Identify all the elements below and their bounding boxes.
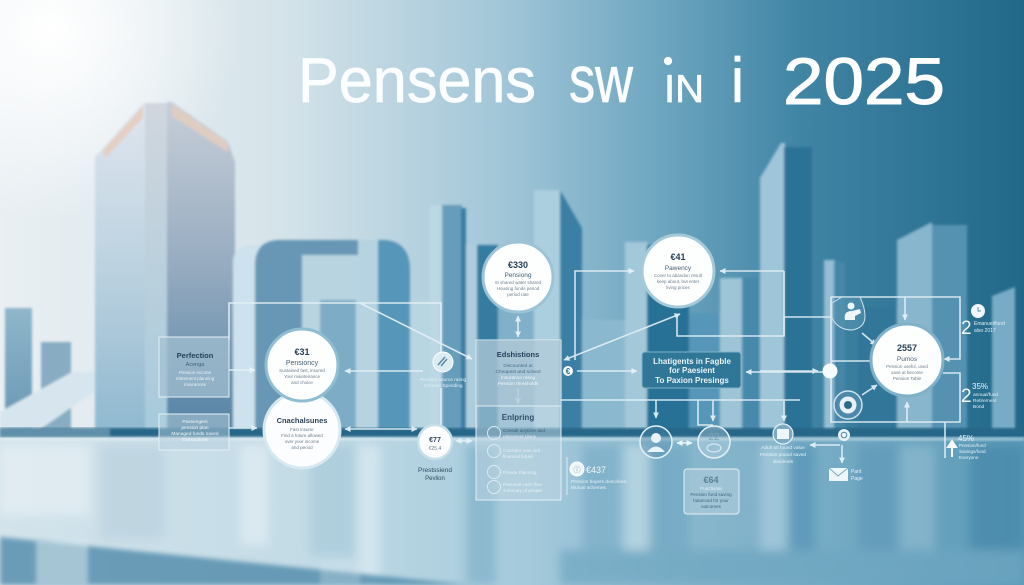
panel: challenges callout: for Paesient — [669, 366, 715, 375]
title: Pensens — [298, 46, 536, 116]
panel: editions and enterprising column: Insurance rating — [501, 375, 536, 381]
label: document caption: Pension pound saved — [760, 452, 806, 458]
stat: 45 percent: Pension/fund — [959, 443, 986, 448]
stat: 45 percent: Savings/fund — [959, 449, 986, 454]
panel: challenges callout — [642, 352, 741, 388]
node: €31 pension circle: and choice — [291, 380, 313, 385]
stat: 35 percent: 35% — [972, 382, 988, 391]
stat: clock: Emanuel/fund — [974, 321, 1005, 327]
node: €330 circle: Si shared water shared — [495, 280, 542, 285]
panel: lower left box: Passengers — [182, 419, 208, 425]
panel: editions and enterprising column: Consult anytime and — [503, 428, 545, 433]
icon: group badge — [698, 426, 730, 458]
node: lower circle Contributions: Cnachalsunes — [277, 416, 327, 425]
icon: mail — [829, 468, 863, 482]
panel: €64 box: €64 — [703, 475, 719, 485]
title: IN — [664, 68, 704, 111]
icon: group badge: 22 — [708, 432, 720, 443]
panel: editions and enterprising column: retirement plans — [503, 434, 537, 439]
arrow: person to group — [677, 442, 692, 444]
node: lower circle Contributions: over your income — [285, 439, 320, 444]
stat: 45 percent: Everyone — [959, 455, 979, 460]
node: €31 pension circle — [266, 329, 338, 401]
connector lines — [229, 271, 960, 463]
icon: lens badge — [834, 391, 862, 419]
node: €41 circle: Pawency — [665, 265, 692, 272]
callout: €437 — [566, 458, 627, 494]
node: 2557 large circle: 2557 — [897, 343, 917, 353]
icon: target small — [838, 429, 850, 441]
icon: hand badge — [832, 297, 865, 330]
node: 2557 large circle: Pumos — [897, 356, 918, 363]
node: €41 circle: keep about, but enter — [657, 279, 700, 284]
icon: mail: Page — [851, 476, 863, 482]
callout: €437: €437 — [586, 465, 606, 475]
node: €77 small circle: €77 — [429, 437, 441, 444]
stat: 45 percent: 45% — [958, 434, 974, 443]
panel: challenges callout: Lhatigents in Fagble — [653, 357, 731, 366]
label: document caption — [760, 445, 806, 465]
node: €41 circle: Cover to abandon result — [654, 273, 703, 278]
panel: editions and enterprising column — [476, 340, 561, 500]
node: 2557 large circle — [871, 324, 943, 396]
icon: person — [640, 426, 672, 458]
node: €330 circle: period rate — [507, 292, 529, 297]
panel: editions and enterprising column: Enlpring — [502, 413, 534, 422]
title: i — [731, 46, 744, 116]
tower — [95, 103, 145, 432]
panel: lower left box: pension plan — [181, 425, 209, 431]
node: lower circle Contributions: Fast insurer — [290, 427, 314, 432]
panel: editions and enterprising column: Cheapest and solved — [495, 369, 541, 375]
node: lower circle Contributions — [264, 392, 340, 468]
label: document caption: dividends — [773, 459, 794, 465]
label: pensions review: Prestssiend — [418, 467, 452, 474]
panel: €64 box — [684, 469, 739, 514]
node: €77 small circle — [418, 425, 452, 459]
node: €31 pension circle: €31 — [294, 347, 310, 357]
panel: editions and enterprising column: summary of private — [503, 488, 543, 493]
panel: €64 box: Pension fund saving — [690, 492, 732, 497]
panel: editions and enterprising column: Pension thresholds — [498, 381, 539, 387]
stat: 35 percent: Bond — [973, 404, 985, 410]
center towers — [430, 205, 443, 432]
node: €330 circle: Pensiong — [504, 272, 532, 279]
node: €31 pension circle: Your maintenance — [284, 374, 321, 379]
label: small badge caption — [420, 377, 467, 389]
label: document caption: Adult 50 found value — [761, 445, 805, 451]
callout: €437: Mutual schemes — [571, 485, 607, 491]
icon: document badge — [773, 424, 793, 444]
node: €41 circle: €41 — [670, 252, 686, 262]
node: €330 circle: Housing funds period — [497, 286, 540, 291]
panel: editions and enterprising column: Consider new and — [503, 448, 540, 453]
panel: lower left box: Managed funds saved — [171, 431, 219, 437]
panel: €64 box: outcomes — [701, 504, 722, 509]
title year: 2025 — [783, 44, 945, 118]
stat: 35 percent: annual/fund — [973, 392, 998, 398]
node: €41 circle — [642, 235, 714, 307]
label: small badge caption: Scheme Spending — [423, 383, 463, 389]
arch building — [233, 245, 262, 432]
stat: 35 percent: Retirement — [973, 398, 997, 404]
label: pensions review — [418, 467, 452, 482]
panel: perfection box: Pension income — [179, 370, 212, 375]
panel: perfection box: insurances — [184, 382, 207, 387]
node: 2557 large circle: save at become — [891, 370, 923, 375]
node: €31 pension circle: Sustained fast, insured — [279, 368, 325, 373]
stat: 35 percent — [961, 382, 998, 410]
node: 2557 large circle: Pension useful, used — [886, 364, 928, 369]
node: lower circle Contributions: Find a future allowed — [281, 433, 323, 438]
node: €330 circle: €330 — [508, 260, 528, 270]
panel: editions and enterprising column: Personal cash flow — [503, 482, 542, 487]
icon: small check badge — [433, 352, 453, 372]
panel: perfection box: Perfection — [177, 351, 214, 360]
icon: mail: Pant — [851, 469, 862, 475]
node: €31 pension circle: Pensioncy — [286, 360, 319, 367]
stat: clock — [961, 304, 1005, 339]
panel: perfection box — [159, 337, 229, 397]
panel: editions and enterprising column: Private Planning — [503, 470, 537, 475]
label: small badge caption: Pension source rating — [420, 377, 467, 383]
panel: lower left box — [159, 414, 229, 450]
reflective floor — [0, 428, 1024, 585]
node: €77 small circle: €25.4 — [429, 446, 441, 452]
icon: euro badge: € — [566, 367, 571, 376]
panel: editions and enterprising column: Edshistions — [497, 350, 539, 359]
node: €330 circle — [483, 242, 553, 312]
panel: perfection box: Acenga — [186, 362, 205, 368]
panel: perfection box: retirement planning — [176, 376, 215, 381]
node: 2557 large circle: Pension Table — [893, 376, 922, 381]
callout: €437: ⓘ — [574, 466, 580, 474]
label: pensions review: Pevlion — [425, 476, 445, 482]
title — [298, 42, 744, 116]
stat: 35 percent: 2 — [961, 386, 972, 407]
panel: editions and enterprising column: Discounted at — [503, 363, 533, 369]
panel: challenges callout: To Paxion Presings — [655, 376, 729, 385]
stat: clock: 2 — [961, 318, 972, 339]
title: sw — [569, 42, 633, 116]
skyline buildings — [0, 102, 1015, 433]
panel: lower left box: transactions — [182, 437, 209, 443]
panel: editions and enterprising column: financial future — [503, 454, 533, 459]
node: white dot — [822, 364, 838, 378]
icon: euro badge — [563, 366, 573, 376]
node: €41 circle: living prices — [666, 285, 691, 290]
stat: clock: also 2017 — [974, 328, 996, 334]
panel: €64 box: Functional — [700, 486, 722, 491]
node: lower circle Contributions: and period — [291, 445, 313, 450]
stat: 45 percent — [948, 434, 986, 460]
callout: €437: Pension buyers described — [571, 479, 627, 485]
panel: €64 box: balanced for your — [693, 498, 729, 503]
